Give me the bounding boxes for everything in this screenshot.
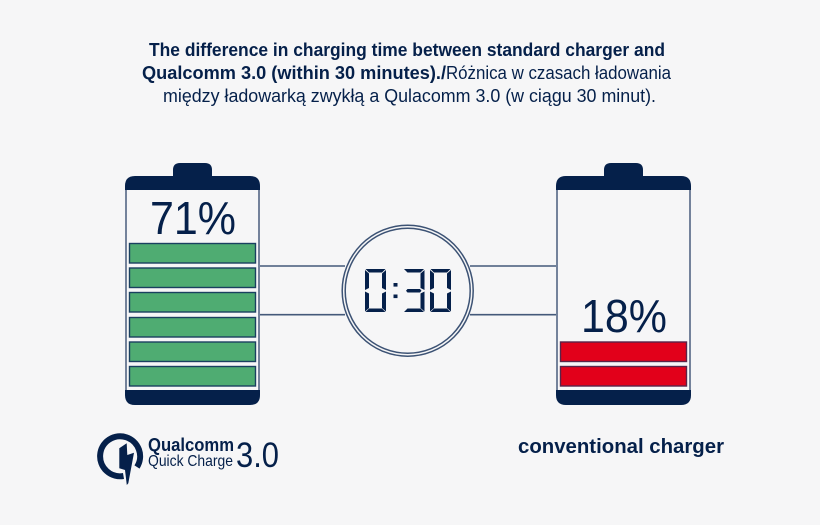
timer clock: 0:30 [342,225,473,356]
connector lines [260,266,556,315]
percentage: 18%: 18% [581,290,667,342]
red charge bars [560,342,686,386]
title: między ładowarką zwykłą a Qulacomm 3.0 (w ciągu 30 minut). [163,86,656,106]
label: conventional charger: conventional charger [518,436,724,458]
digital digits [365,269,451,312]
Qualcomm Quick Charge 3.0 logo: Quick Charge [148,453,233,470]
Qualcomm Quick Charge 3.0 logo: Qualcomm [148,435,234,455]
title: Różnica w czasach ładowania [446,63,672,83]
Qualcomm Quick Charge 3.0 logo: 3.0 [236,436,279,475]
right battery: conventional 18% [556,163,691,405]
Qualcomm Quick Charge 3.0 logo [100,435,279,485]
title: Qualcomm 3.0 (within 30 minutes)./ [142,63,446,83]
title [142,40,672,106]
title: The difference in charging time between standard charger and [149,40,665,60]
icon: lightning ring [100,436,140,485]
percentage: 71%: 71% [150,192,236,244]
left battery: Qualcomm 71% [125,163,260,405]
green charge bars [130,244,256,386]
